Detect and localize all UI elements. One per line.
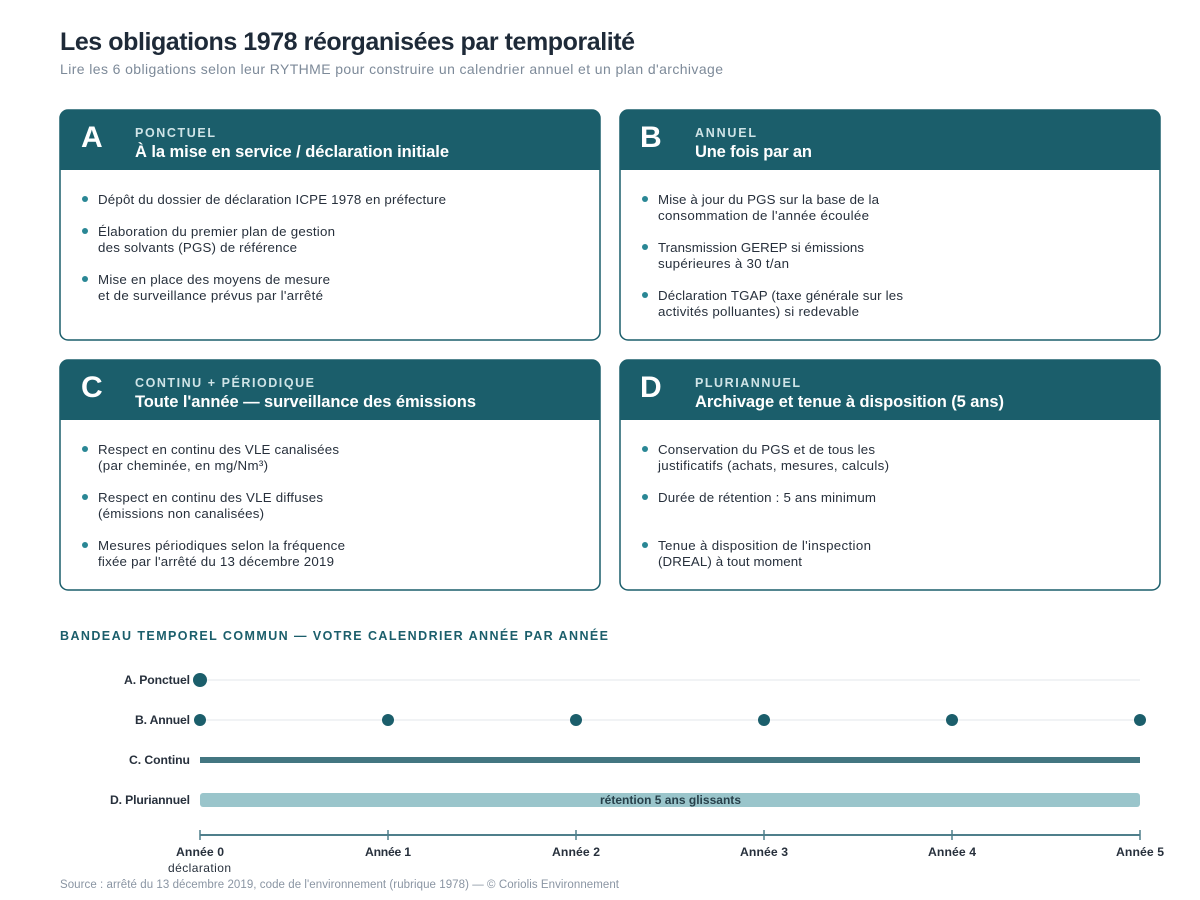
time axis: Année 4 bbox=[928, 845, 976, 859]
panel D bullet list bbox=[642, 442, 889, 569]
timeline chart bbox=[110, 673, 1164, 875]
panel B bullet list: Déclaration TGAP (taxe générale sur les bbox=[658, 288, 903, 303]
panel B bullet list: supérieures à 30 t/an bbox=[658, 256, 789, 271]
time axis: déclaration bbox=[168, 861, 231, 875]
row: D pluriannuel bbox=[110, 793, 1140, 807]
panel B bullet list: activités polluantes) si redevable bbox=[658, 304, 859, 319]
panel D letter: D bbox=[640, 371, 662, 404]
panel B eyebrow: ANNUEL bbox=[695, 126, 756, 140]
panel C bullet list: Respect en continu des VLE canalisées bbox=[98, 442, 339, 457]
panel C heading: Toute l'année — surveillance des émissions bbox=[135, 393, 476, 411]
panel B bullet list bbox=[642, 192, 903, 319]
panel C bullet list: (émissions non canalisées) bbox=[98, 506, 264, 521]
panel A eyebrow: PONCTUEL bbox=[135, 126, 215, 140]
row: C continu: C. Continu bbox=[129, 753, 190, 767]
time axis: Année 5 bbox=[1116, 845, 1164, 859]
row: B annuel: B. Annuel bbox=[135, 713, 190, 727]
time axis bbox=[168, 830, 1164, 875]
panel A bullet list: Dépôt du dossier de déclaration ICPE 1978 en préfecture bbox=[98, 192, 446, 207]
panel D eyebrow: PLURIANNUEL bbox=[695, 376, 800, 390]
panel C bullet list: Mesures périodiques selon la fréquence bbox=[98, 538, 345, 553]
subtitle: Lire les 6 obligations selon leur RYTHME pour construire un calendrier annuel et un plan d'archivage bbox=[60, 61, 723, 77]
panel A bullet list: Élaboration du premier plan de gestion bbox=[98, 224, 335, 239]
panel C bullet list: fixée par l'arrêté du 13 décembre 2019 bbox=[98, 554, 334, 569]
panel C eyebrow: CONTINU + PÉRIODIQUE bbox=[135, 375, 314, 390]
panel D bullet list: Durée de rétention : 5 ans minimum bbox=[658, 490, 876, 505]
panel A letter: A bbox=[81, 121, 103, 154]
panel C bullet list bbox=[82, 442, 345, 569]
row: D pluriannuel: D. Pluriannuel bbox=[110, 793, 190, 807]
row: B annuel bbox=[135, 713, 1146, 727]
panel: A ponctuel bbox=[60, 110, 600, 340]
time axis: Année 0 bbox=[176, 845, 224, 859]
timeline heading: BANDEAU TEMPOREL COMMUN — VOTRE CALENDRIER ANNÉE PAR ANNÉE bbox=[60, 628, 608, 643]
panel D bullet list: Tenue à disposition de l'inspection bbox=[658, 538, 871, 553]
row: A ponctuel: A. Ponctuel bbox=[124, 673, 190, 687]
panel C letter: C bbox=[81, 371, 103, 404]
panel A header bbox=[60, 110, 600, 170]
row: D pluriannuel: rétention 5 ans glissants bbox=[600, 793, 741, 807]
panel B heading: Une fois par an bbox=[695, 143, 812, 161]
panel C bullet list: Respect en continu des VLE diffuses bbox=[98, 490, 323, 505]
panel A bullet list bbox=[82, 192, 446, 303]
panel B bullet list: Transmission GEREP si émissions bbox=[658, 240, 864, 255]
panel A bullet list: Mise en place des moyens de mesure bbox=[98, 272, 330, 287]
panel B letter: B bbox=[640, 121, 662, 154]
panel A bullet list: des solvants (PGS) de référence bbox=[98, 240, 297, 255]
panel B bullet list: Mise à jour du PGS sur la base de la bbox=[658, 192, 880, 207]
panel B bullet list: consommation de l'année écoulée bbox=[658, 208, 869, 223]
panel A bullet list: et de surveillance prévus par l'arrêté bbox=[98, 288, 323, 303]
panel C header bbox=[60, 360, 600, 420]
panel D heading: Archivage et tenue à disposition (5 ans) bbox=[695, 393, 1004, 411]
row: A ponctuel bbox=[124, 673, 1140, 687]
panel: C continu bbox=[60, 360, 600, 590]
panel D bullet list: justificatifs (achats, mesures, calculs) bbox=[657, 458, 889, 473]
time axis: Année 3 bbox=[740, 845, 788, 859]
panel: D pluriannuel bbox=[620, 360, 1160, 590]
panel D bullet list: (DREAL) à tout moment bbox=[658, 554, 802, 569]
time axis: Année 1 bbox=[365, 845, 411, 859]
title: Les obligations 1978 réorganisées par temporalité bbox=[60, 28, 635, 56]
panel B header bbox=[620, 110, 1160, 170]
row: C continu bbox=[129, 753, 1140, 767]
panel C bullet list: (par cheminée, en mg/Nm³) bbox=[98, 458, 268, 473]
panel D bullet list: Conservation du PGS et de tous les bbox=[658, 442, 875, 457]
panel D header bbox=[620, 360, 1160, 420]
source note: Source : arrêté du 13 décembre 2019, code de l'environnement (rubrique 1978) — © Coriolis Environnement bbox=[60, 879, 620, 891]
panel: B annuel bbox=[620, 110, 1160, 340]
panel A heading: À la mise en service / déclaration initiale bbox=[135, 142, 449, 161]
time axis: Année 2 bbox=[552, 845, 600, 859]
